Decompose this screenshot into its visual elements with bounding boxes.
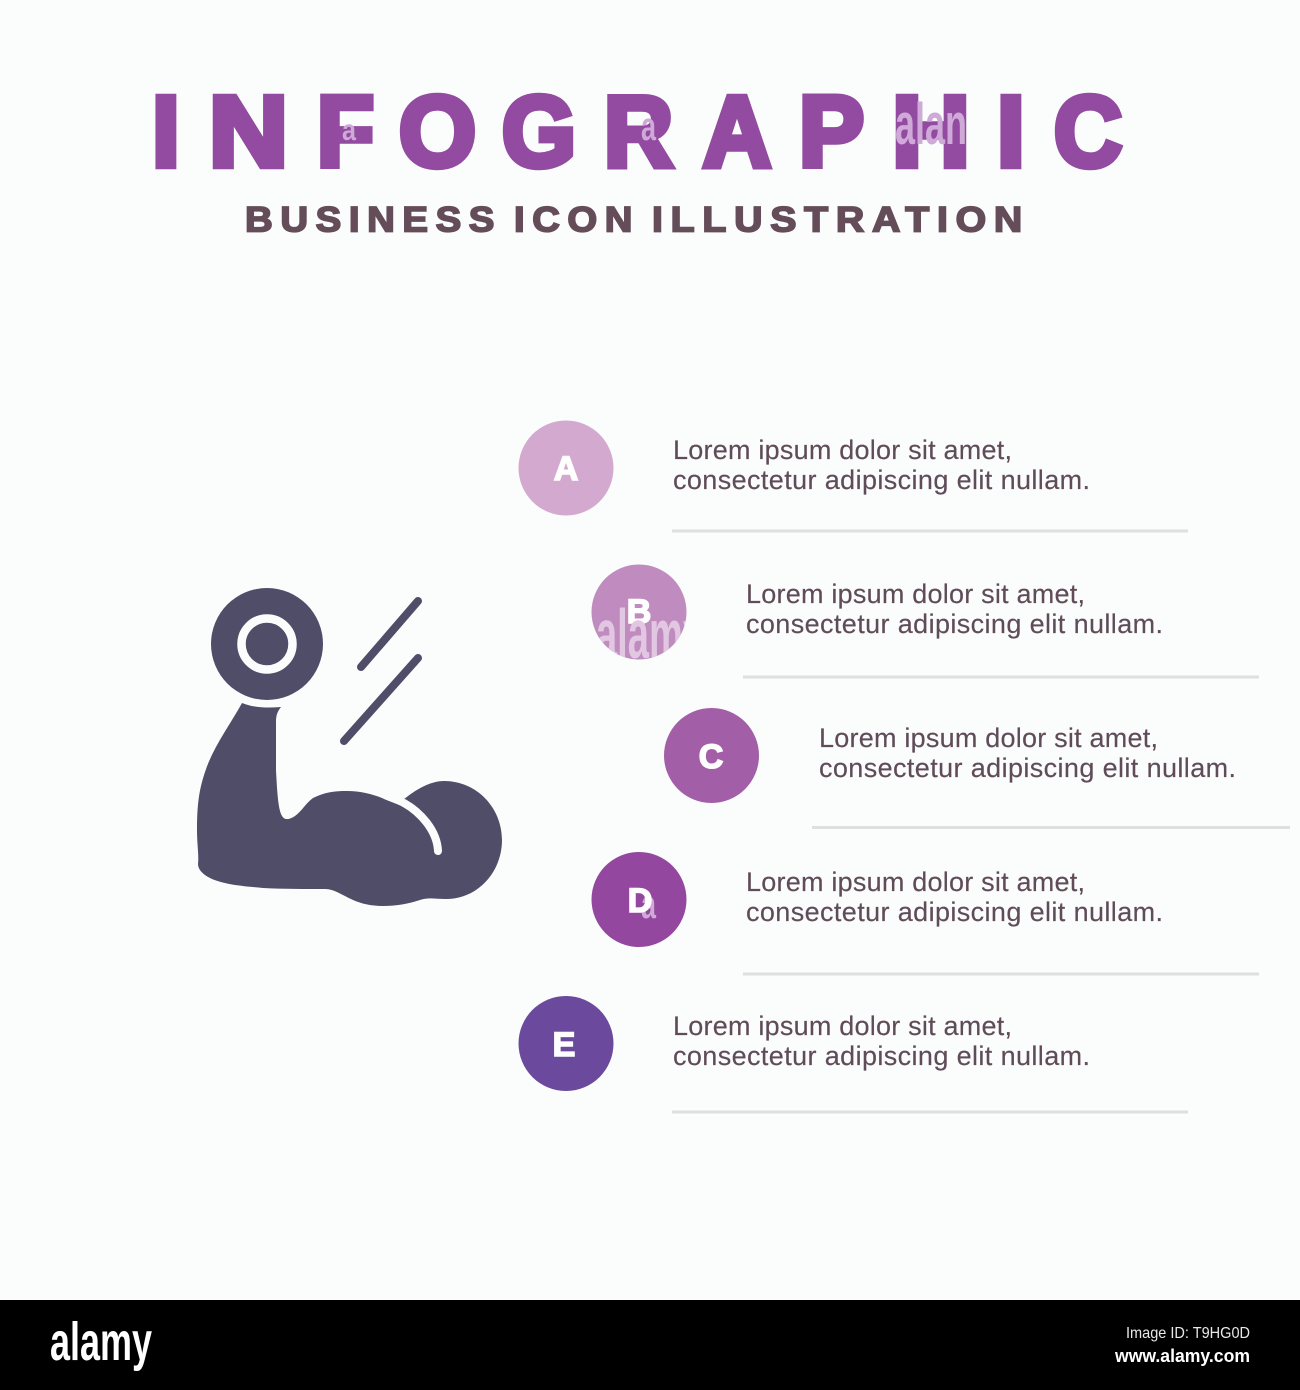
text C: consectetur adipiscing elit nullam. <box>819 753 1236 783</box>
text E: consectetur adipiscing elit nullam. <box>673 1041 1090 1071</box>
text A <box>673 435 1090 495</box>
text A: consectetur adipiscing elit nullam. <box>673 465 1090 495</box>
footer image id: Image ID: T9HG0D <box>1126 1325 1250 1342</box>
title: I <box>997 76 1025 188</box>
badge letter D: D <box>628 882 652 920</box>
title watermark fragments: alan <box>895 92 967 157</box>
subtitle: ILLUSTRATION <box>652 200 1030 240</box>
text C <box>819 723 1236 783</box>
item D <box>592 852 1259 976</box>
text B: consectetur adipiscing elit nullam. <box>746 609 1163 639</box>
watermark on badge D: a <box>641 883 657 927</box>
badge letter C: C <box>699 738 723 776</box>
text C: Lorem ipsum dolor sit amet, <box>819 723 1158 753</box>
divider B <box>743 676 1259 678</box>
divider A <box>672 530 1188 532</box>
icon: dumbbell ring <box>242 618 292 670</box>
title watermark fragments <box>342 92 967 157</box>
divider C <box>812 826 1290 829</box>
title: F <box>317 76 374 188</box>
title: R <box>604 76 673 188</box>
text B: Lorem ipsum dolor sit amet, <box>746 579 1085 609</box>
title <box>152 76 1122 188</box>
title: N <box>209 76 288 188</box>
text B <box>746 579 1163 639</box>
icon: arm <box>197 703 502 906</box>
title: C <box>1054 76 1122 188</box>
footer url: www.alamy.com <box>1114 1346 1250 1366</box>
footer logo: alamy <box>50 1312 152 1372</box>
badge letter A: A <box>554 450 578 488</box>
title: P <box>799 76 864 188</box>
footer bar <box>0 1300 1300 1390</box>
text E <box>673 1011 1090 1071</box>
item C <box>664 708 1290 829</box>
item E <box>518 996 1188 1114</box>
icon: bicep highlight <box>404 803 438 851</box>
badge C <box>664 708 759 803</box>
divider D <box>743 972 1259 976</box>
text D: consectetur adipiscing elit nullam. <box>746 897 1163 927</box>
subtitle <box>245 200 1030 240</box>
item A <box>518 420 1188 532</box>
badge A <box>518 420 614 516</box>
watermark on badge B: alamy <box>596 595 704 673</box>
title: O <box>399 76 476 188</box>
badge E <box>518 996 614 1091</box>
badge letter E: E <box>553 1026 575 1064</box>
text D <box>746 867 1163 927</box>
title: H <box>892 76 970 188</box>
text D: Lorem ipsum dolor sit amet, <box>746 867 1085 897</box>
title: I <box>152 76 180 188</box>
text A: Lorem ipsum dolor sit amet, <box>673 435 1012 465</box>
icon: motion lines <box>344 601 418 741</box>
text E: Lorem ipsum dolor sit amet, <box>673 1011 1012 1041</box>
item B <box>592 564 1259 678</box>
title watermark fragments: a <box>641 105 657 149</box>
title watermark fragments: a <box>342 114 356 147</box>
title: A <box>703 76 771 188</box>
badge B <box>592 564 686 660</box>
badge D <box>592 852 686 947</box>
divider E <box>672 1110 1188 1114</box>
subtitle: BUSINESS <box>245 200 502 240</box>
title: G <box>502 76 576 188</box>
badge letter B: B <box>627 593 651 631</box>
subtitle: ICON <box>514 200 640 240</box>
icon: flexed arm with dumbbell <box>197 588 502 906</box>
icon: dumbbell weight <box>211 588 323 700</box>
